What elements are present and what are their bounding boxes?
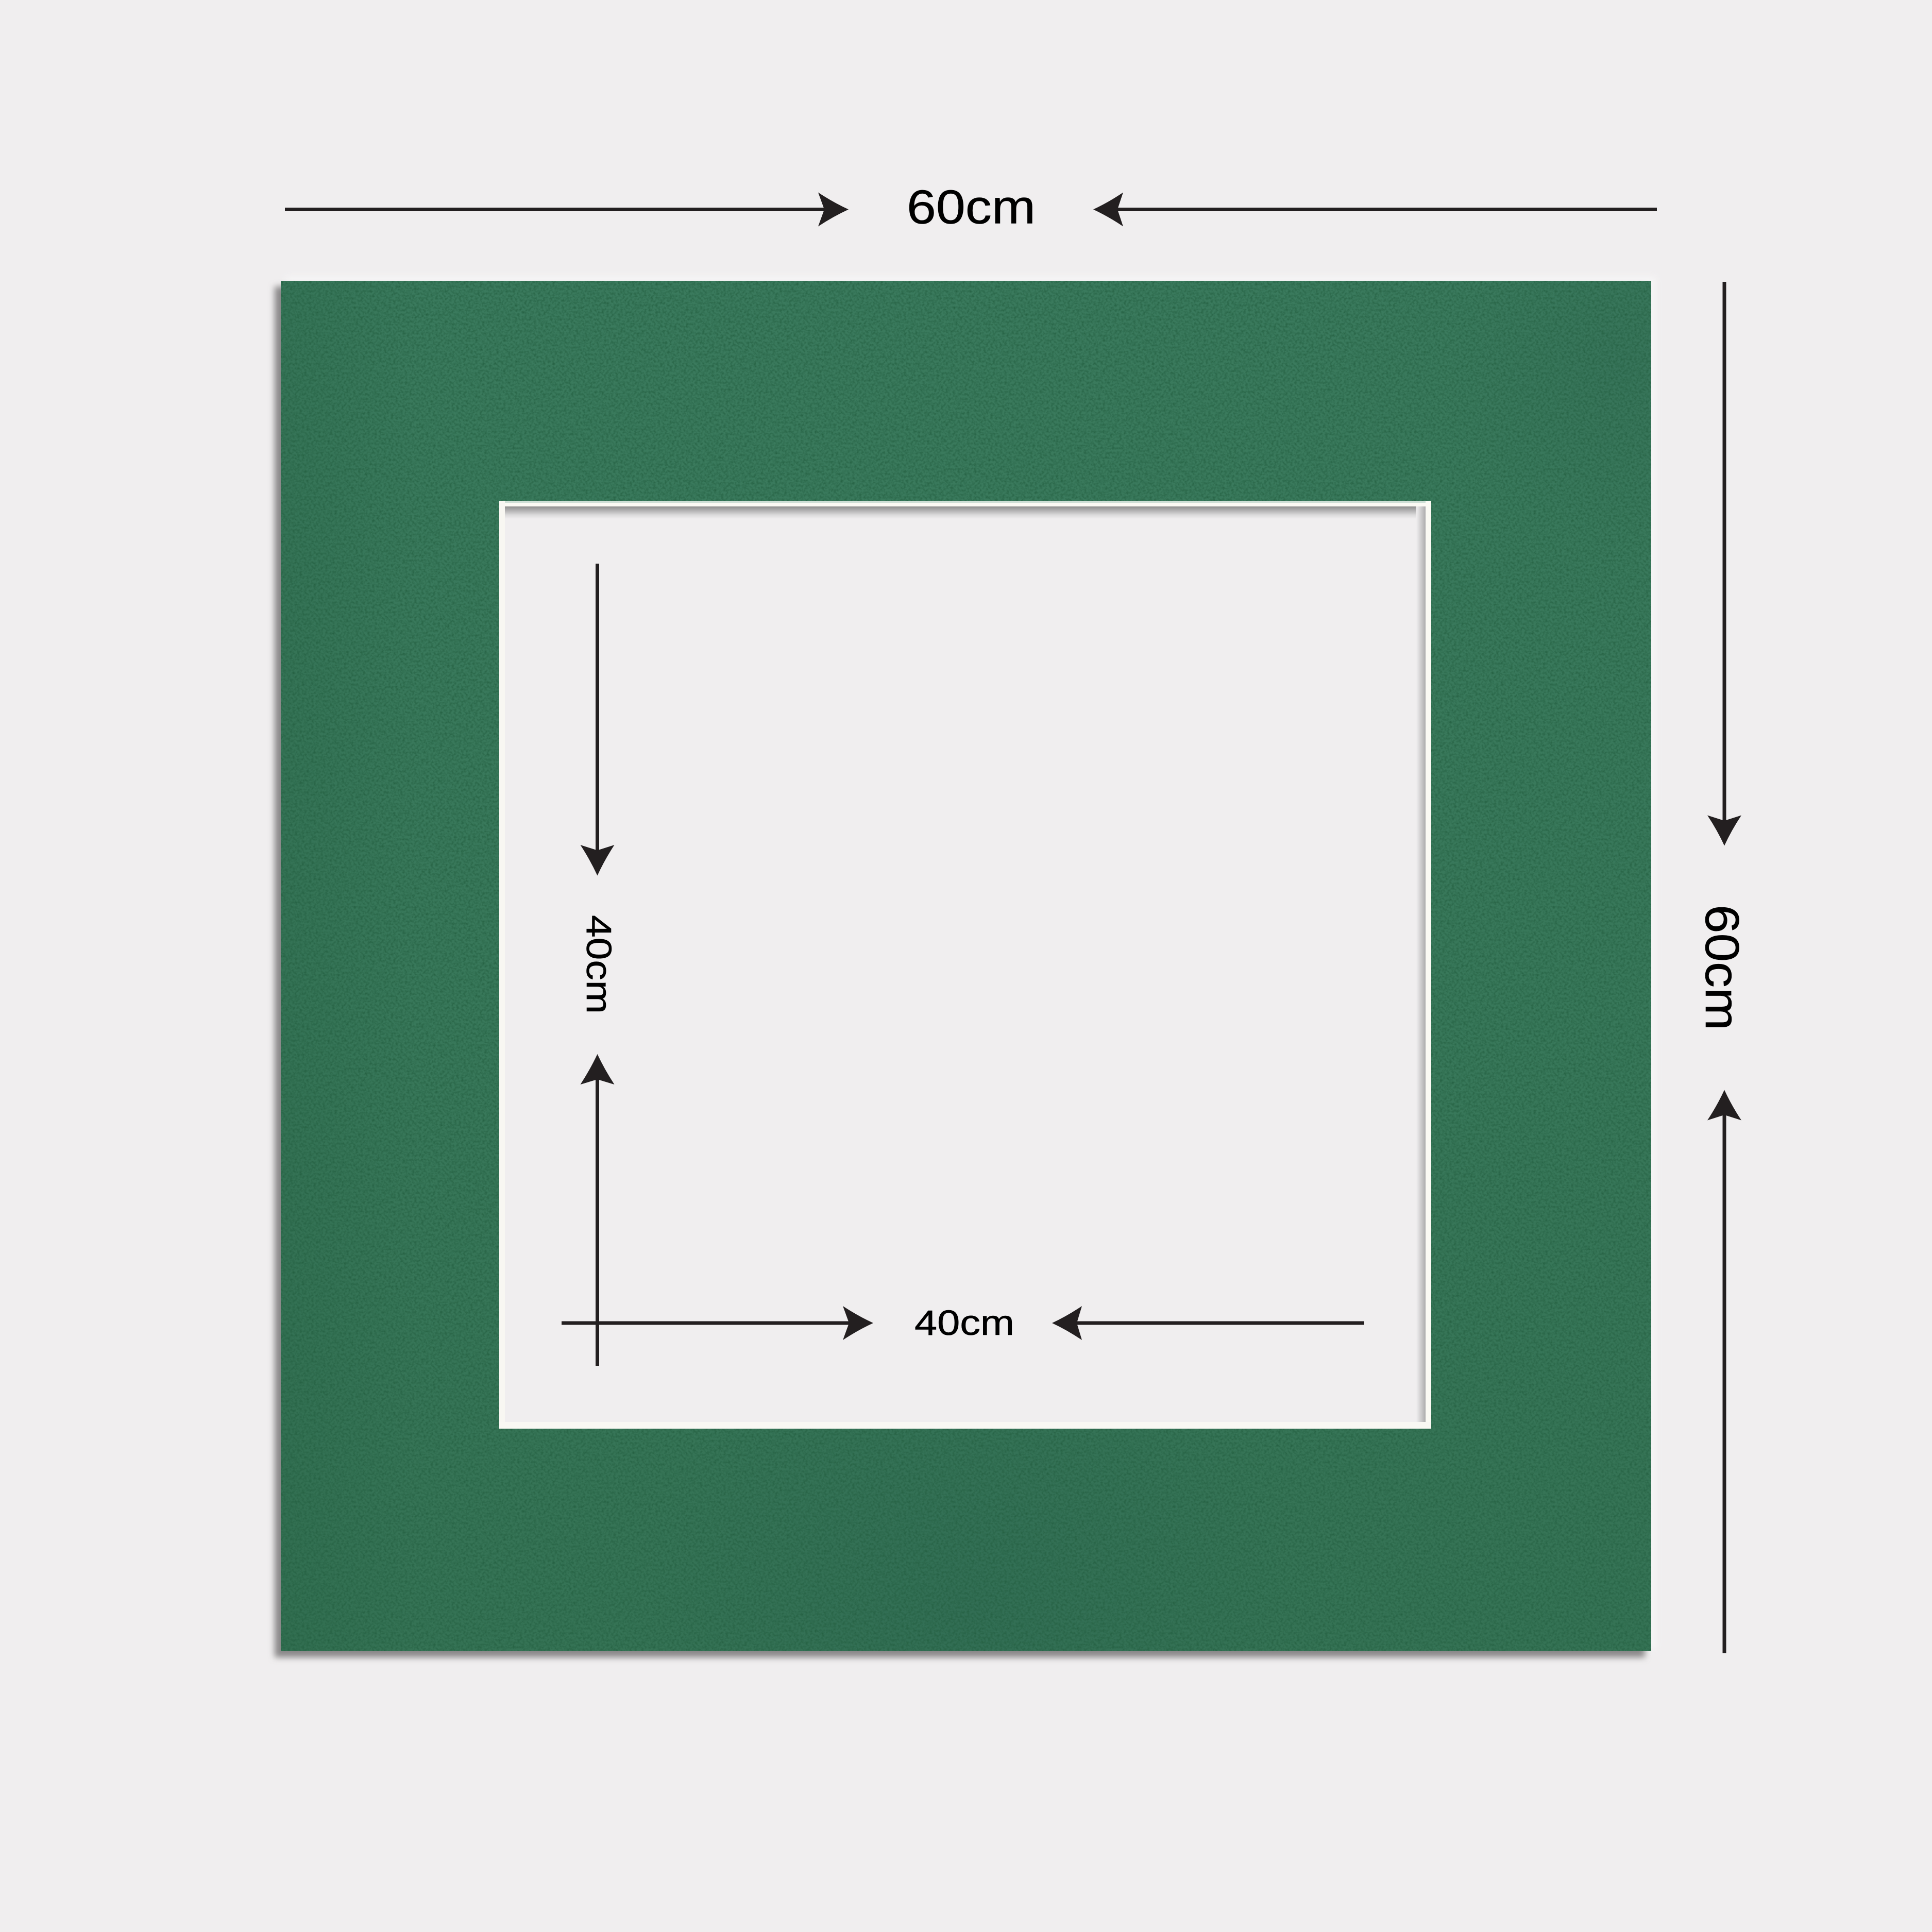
arrow: bottom pointing up <box>1707 1090 1741 1653</box>
arrow: right side pointing left <box>1052 1306 1364 1340</box>
label: 40cm: 40cm <box>914 1303 1014 1343</box>
dimension: opening width 40cm <box>562 1303 1364 1343</box>
arrow: bottom pointing up <box>580 1054 614 1366</box>
arrow: left side pointing right <box>562 1306 873 1340</box>
label: 60cm: 60cm <box>907 180 1036 234</box>
arrow: right side pointing left <box>1093 193 1657 227</box>
window opening with bevel <box>499 501 1431 1429</box>
arrow: top pointing down <box>580 564 614 876</box>
dimension: outer width 60cm <box>285 180 1657 234</box>
dimension: opening height 40cm <box>579 564 619 1366</box>
dimension: outer height 60cm <box>1696 282 1749 1653</box>
arrow: left side pointing right <box>285 193 849 227</box>
label: 40cm rotated: 40cm <box>579 915 619 1014</box>
mat board shadow <box>275 276 1656 1657</box>
arrow: top pointing down <box>1707 282 1741 846</box>
label: 60cm rotated: 60cm <box>1696 905 1749 1030</box>
mat board: green frame with square opening <box>281 281 1651 1651</box>
